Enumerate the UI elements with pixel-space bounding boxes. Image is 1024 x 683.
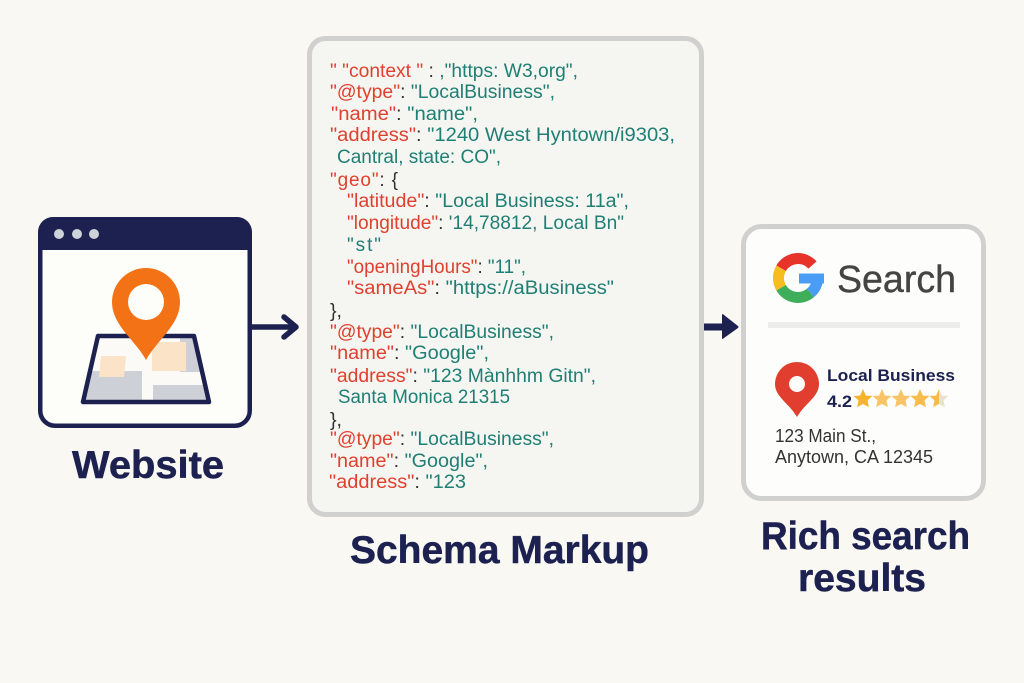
code block: " "context " : ,"https: W3,org", — [330, 61, 578, 82]
icon: star rating — [854, 389, 948, 407]
heading: rich search results: Rich search — [761, 515, 970, 558]
heading: schema markup: Schema Markup — [350, 529, 649, 572]
text: search: Search — [837, 259, 956, 301]
code block — [329, 61, 675, 493]
arrow: website to schema — [252, 317, 296, 337]
heading: rich search results: results — [798, 557, 926, 600]
icon: browser window — [38, 217, 252, 426]
code block: "name": "name", — [331, 104, 478, 125]
code block: "address": "123 Mànhhm Gitn", — [330, 366, 596, 387]
code block: "openingHours": "11", — [347, 257, 526, 278]
text: address: Anytown, CA 12345 — [775, 447, 933, 467]
code block: "name": "Google", — [330, 451, 488, 472]
icon: red location pin — [775, 362, 819, 417]
code block: }, — [330, 410, 342, 431]
text: address: 123 Main St., — [775, 426, 876, 446]
code block: "longitude": '14,78812, Local Bn" — [347, 213, 624, 234]
heading: rich search results — [761, 515, 970, 600]
text: address — [775, 426, 933, 467]
panel: schema markup code — [310, 38, 702, 572]
code block: "@type": "LocalBusiness", — [330, 82, 555, 103]
panel: rich search results — [744, 226, 984, 498]
icon: map — [80, 334, 212, 404]
code block: Cantral, state: CO", — [337, 147, 501, 168]
code block: "address": "123 — [329, 472, 466, 493]
code block: "address" : "1240 West Hyntown/i9303, — [330, 125, 675, 146]
code block: Santa Monica 21315 — [338, 387, 510, 408]
icon: location pin — [112, 268, 180, 360]
code block: "geo": { — [330, 170, 399, 191]
text: rating value: 4.2 — [827, 392, 852, 411]
code block: "sameAs" : "https://aBusiness" — [347, 278, 614, 299]
code block: "name": "Google", — [330, 343, 489, 364]
code block: "latitude": "Local Business: 11a", — [347, 191, 629, 212]
code block: }, — [330, 301, 342, 322]
heading: website: Website — [72, 444, 224, 487]
icon: google G — [778, 259, 824, 297]
panel: website — [38, 217, 252, 487]
text: local business: Local Business — [827, 366, 955, 385]
arrow: schema to results — [704, 314, 738, 339]
code block: "@type": "LocalBusiness", — [330, 322, 554, 343]
code block: "@type": "LocalBusiness", — [330, 429, 554, 450]
code block: "st" — [347, 235, 381, 256]
